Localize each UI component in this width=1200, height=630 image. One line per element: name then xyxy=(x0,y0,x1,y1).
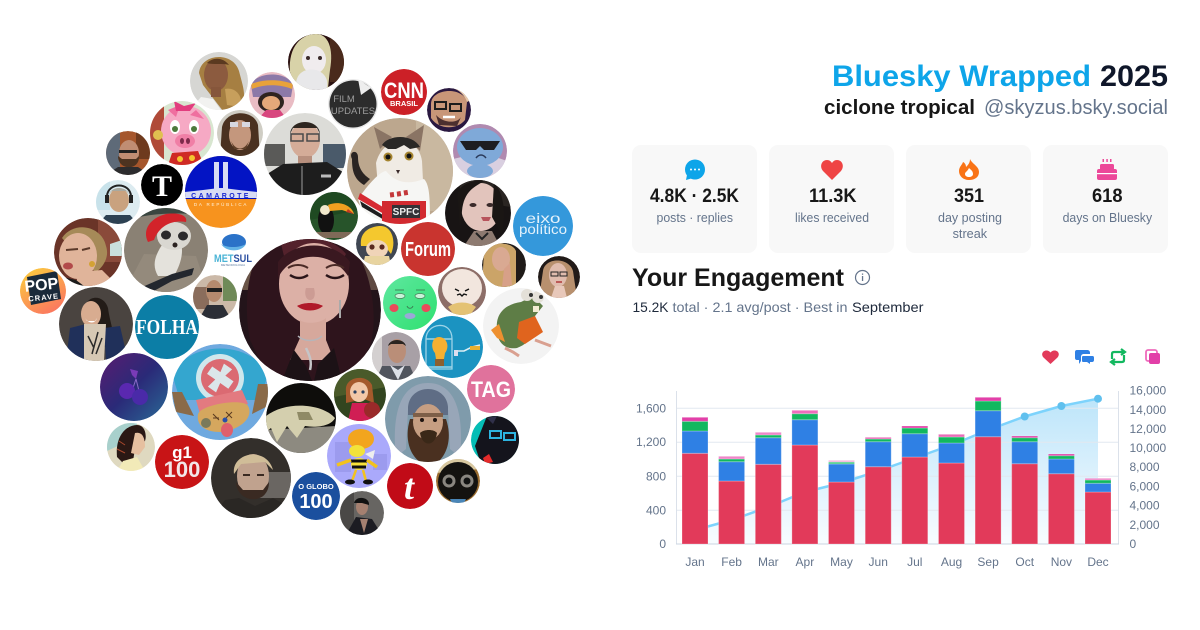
avatar: MetSul logo: METEOROLOGIA xyxy=(221,263,245,267)
avatar: MetSul logo: METSUL xyxy=(214,253,252,265)
avatar: Eixo Político logo: político xyxy=(519,221,567,237)
stat card: posts and replies xyxy=(632,145,757,253)
left axis labels: 400 xyxy=(646,504,666,518)
right axis labels: 6,000 xyxy=(1130,480,1160,494)
stat card: days on Bluesky: 618 xyxy=(1092,186,1122,207)
avatar: main profile photo of woman with red lips xyxy=(239,236,381,381)
chart gridlines and axes xyxy=(676,391,1119,544)
engagement summary text: 15.2K xyxy=(632,299,669,315)
avatar: CNN Brasil logo: CNN xyxy=(384,78,424,103)
icon: flame xyxy=(959,159,979,180)
avatar: Forum logo: Forum xyxy=(405,239,451,261)
stat card: days on Bluesky xyxy=(1043,145,1168,253)
stat card: day posting streak: streak xyxy=(953,227,988,241)
avatar: man in suit xyxy=(372,332,420,380)
chart legend icons xyxy=(1042,349,1160,365)
avatar: green cartoon face xyxy=(383,276,437,330)
month labels xyxy=(685,555,1109,569)
avatar: man with headset xyxy=(96,180,140,224)
avatar: man with sunglasses xyxy=(193,275,237,319)
header: user name and handle: @skyzus.bsky.social xyxy=(984,96,1168,119)
bar: February xyxy=(719,456,745,544)
right axis labels: 2,000 xyxy=(1130,518,1160,532)
avatar: purple cherries xyxy=(100,353,168,421)
month labels: May xyxy=(830,555,853,569)
month labels: Mar xyxy=(758,555,779,569)
month labels: Apr xyxy=(796,555,814,569)
month labels: Jul xyxy=(907,555,922,569)
avatar: praying blonde xyxy=(482,243,526,287)
left axis labels: 1,600 xyxy=(636,402,666,416)
avatar: TAG logo: TAG xyxy=(471,377,511,402)
avatar: Film Updates sticker: FILM xyxy=(333,94,355,105)
avatar: Film Updates sticker xyxy=(328,79,378,129)
avatar: Eixo Político logo: eixo xyxy=(526,210,561,226)
legend icon: replies bubbles xyxy=(1075,350,1094,364)
month labels: Dec xyxy=(1087,555,1109,569)
engagement summary text xyxy=(632,299,924,315)
avatar: Pop Crave logo: CRAVE xyxy=(28,291,59,304)
avatar: white round plush xyxy=(438,267,486,315)
avatar: O Globo 100 logo: O GLOBO xyxy=(298,482,334,491)
right axis labels: 10,000 xyxy=(1130,441,1167,455)
left axis labels xyxy=(636,402,666,551)
bar: January xyxy=(682,417,708,544)
legend icon: reposts arrows xyxy=(1111,349,1125,365)
left axis labels: 800 xyxy=(646,470,666,484)
right axis labels: 14,000 xyxy=(1130,403,1167,417)
avatar: owl xyxy=(288,34,344,90)
avatar: letter t logo: t xyxy=(404,467,415,507)
combo chart: monthly engagement bars and cumulative line xyxy=(636,384,1167,569)
avatar: smiling man with glasses xyxy=(427,87,471,132)
avatar: g1 100 logo: 100 xyxy=(164,457,200,482)
avatar: raccoon in santa hat xyxy=(124,208,208,292)
bar: March xyxy=(755,432,781,544)
stat card: likes received: 11.3K xyxy=(809,186,857,207)
avatar: lightbulb in cage xyxy=(421,316,483,378)
stat card: days on Bluesky: days on Bluesky xyxy=(1063,211,1153,225)
avatar: Folha logo: FOLHA xyxy=(136,315,199,339)
avatar: black fuzzy creature xyxy=(436,459,480,503)
avatar: toucan xyxy=(310,192,358,240)
avatar: woman blowing kiss xyxy=(54,218,122,286)
bar: August xyxy=(938,434,964,544)
header: title: 2025 xyxy=(1100,60,1168,93)
avatar: Camarote da República logo: DA REPÚBLICA xyxy=(194,201,248,207)
bar: October xyxy=(1012,436,1038,544)
avatar: girl with red dress cartoon xyxy=(334,369,386,421)
stat card: likes received xyxy=(769,145,894,253)
avatar: Camarote da República logo: CAMAROTE xyxy=(191,193,251,200)
avatar: Eixo Político logo xyxy=(513,196,573,256)
engagement summary text: total · 2.1 avg/post · Best in xyxy=(672,299,848,315)
avatar: Film Updates sticker: UPDATES xyxy=(331,106,375,117)
left axis labels: 1,200 xyxy=(636,435,666,449)
stat card: posts and replies: posts · replies xyxy=(656,211,733,225)
avatar: blond bearded man xyxy=(211,438,291,518)
month labels: Feb xyxy=(721,555,742,569)
month labels: Aug xyxy=(941,555,962,569)
avatar: woman in blue blazer xyxy=(59,287,133,361)
month labels: Sep xyxy=(977,555,999,569)
avatar: TAG logo xyxy=(467,365,515,413)
icon: birthday cake xyxy=(1097,159,1117,180)
right axis labels: 12,000 xyxy=(1130,422,1167,436)
avatar: Chopper cartoon xyxy=(172,344,268,440)
avatar: g1 100 logo: g1 xyxy=(172,443,192,462)
header: user name and handle xyxy=(824,96,1168,119)
avatar: goth girl xyxy=(445,180,511,246)
heading: Your Engagement: Your Engagement xyxy=(632,264,845,292)
stat card: posts and replies: 4.8K · 2.5K xyxy=(650,186,739,207)
avatar bubble cluster xyxy=(20,34,580,535)
engagement summary text: September xyxy=(852,299,924,315)
avatar: man with glasses on head xyxy=(217,110,263,157)
bar: September xyxy=(975,397,1001,544)
avatar: CNN Brasil logo xyxy=(381,69,427,115)
month labels: Jan xyxy=(685,555,705,569)
avatar: NYT logo xyxy=(141,164,183,206)
stat card: day posting streak: day posting xyxy=(938,211,1002,225)
right axis labels: 4,000 xyxy=(1130,498,1160,512)
avatar: Camarote da República logo xyxy=(185,156,257,228)
month labels: Nov xyxy=(1051,555,1072,569)
icon: chat bubble xyxy=(685,160,705,180)
avatar: pink pig cartoon xyxy=(150,101,214,165)
avatar: Forum logo xyxy=(401,222,455,276)
bar: April xyxy=(792,410,818,544)
legend icon: likes heart xyxy=(1042,350,1059,364)
avatar: letter t logo xyxy=(387,463,433,509)
avatar: man in black jacket xyxy=(264,113,346,195)
month labels: Oct xyxy=(1015,555,1035,569)
avatar: g1 100 logo xyxy=(155,435,209,489)
legend icon: quotes copy xyxy=(1146,350,1160,364)
left axis labels: 0 xyxy=(659,537,666,551)
avatar: CNN Brasil logo: BRASIL xyxy=(390,99,418,108)
header: title: Bluesky Wrapped xyxy=(832,60,1091,93)
bar: December xyxy=(1085,478,1111,544)
cumulative line xyxy=(695,395,1102,530)
avatar: cat in SPFC jersey xyxy=(347,118,453,224)
avatar: animal skull xyxy=(266,383,336,453)
avatar: cat in SPFC jersey: SPFC xyxy=(393,207,419,218)
right axis labels: 0 xyxy=(1130,537,1136,551)
avatar: blonde woman xyxy=(190,52,248,111)
avatar: Darth Vader cartoon xyxy=(471,416,519,464)
bar: July xyxy=(902,426,928,544)
right axis labels: 16,000 xyxy=(1130,384,1167,398)
icon: heart xyxy=(821,160,843,180)
stacked bars xyxy=(682,397,1111,544)
right axis labels: 8,000 xyxy=(1130,460,1160,474)
avatar: NYT logo: T xyxy=(152,170,172,203)
stat card: likes received: likes received xyxy=(795,211,869,225)
avatar: Pop Crave logo xyxy=(20,268,66,314)
avatar: blue cartoon with sunglasses xyxy=(453,124,507,178)
avatar: O Globo 100 logo: 100 xyxy=(299,491,333,513)
avatar: cartoon woman with dark hair xyxy=(107,423,155,471)
avatar: strawberry hat girl xyxy=(249,72,295,118)
stat card: day posting streak xyxy=(906,145,1031,253)
avatar: bearded bald man xyxy=(106,131,150,175)
avatar: blonde woman with glasses xyxy=(538,256,580,298)
avatar: bee cartoon xyxy=(327,424,391,488)
month labels: Jun xyxy=(869,555,888,569)
avatar: long-haired man in fur hat xyxy=(385,376,471,462)
right axis labels xyxy=(1130,384,1167,551)
bar: November xyxy=(1048,454,1074,544)
avatar: MetSul logo xyxy=(214,234,252,267)
avatar: green rat cartoon xyxy=(483,288,559,364)
bar: June xyxy=(865,437,891,544)
avatar: O Globo 100 logo xyxy=(292,472,340,520)
icon: info xyxy=(856,270,870,284)
stat card: day posting streak: 351 xyxy=(954,186,984,207)
avatar: blonde doll xyxy=(356,223,398,265)
cumulative area xyxy=(695,399,1098,544)
avatar: Folha logo xyxy=(135,295,199,359)
avatar: person in dark profile xyxy=(340,491,384,535)
bar: May xyxy=(828,460,854,544)
header: user name and handle: ciclone tropical xyxy=(824,96,975,119)
avatar: Pop Crave logo: POP xyxy=(24,275,59,296)
